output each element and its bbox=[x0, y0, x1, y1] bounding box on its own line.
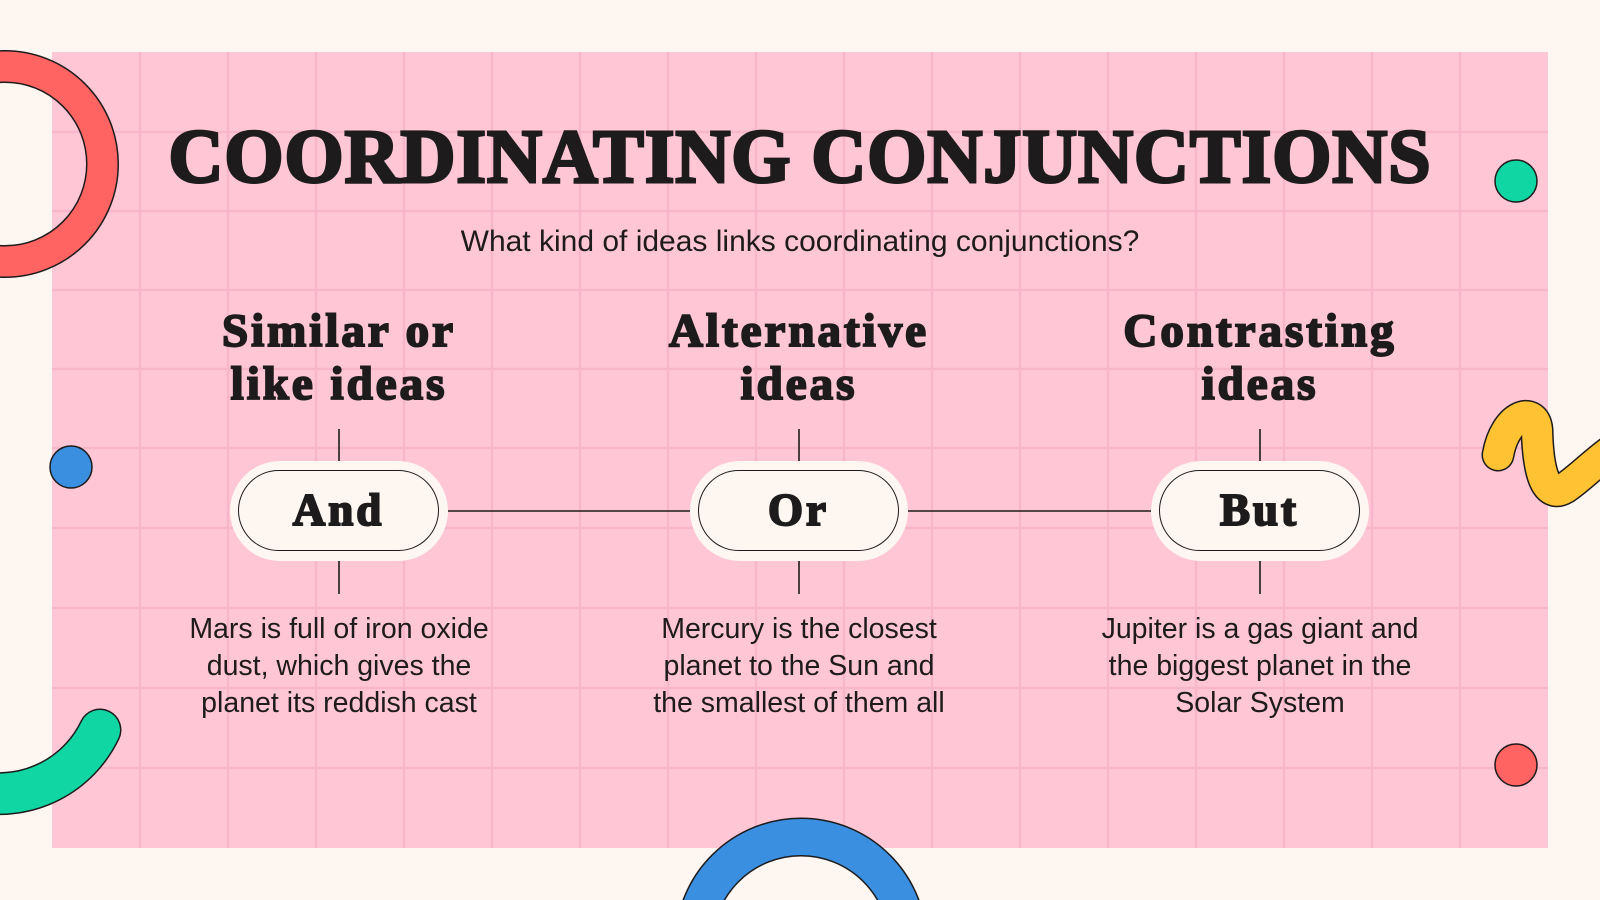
column: similar ideas bbox=[189, 305, 489, 719]
description: Jupiter: Solar System bbox=[1175, 687, 1345, 719]
description: Jupiter: Jupiter is a gas giant and bbox=[1102, 613, 1418, 645]
description: Jupiter bbox=[1102, 613, 1418, 719]
title: COORDINATING CONJUNCTIONS bbox=[169, 115, 1431, 199]
heading: contrasting bbox=[1123, 305, 1397, 410]
pill: And bbox=[230, 461, 448, 561]
heading: alternative bbox=[668, 305, 929, 410]
heading: similar: like ideas bbox=[231, 358, 447, 410]
subtitle: What kind of ideas links coordinating conjunctions? bbox=[461, 225, 1139, 258]
description: Mars: dust, which gives the bbox=[207, 650, 471, 682]
description: Mars: planet its reddish cast bbox=[201, 687, 477, 719]
heading: alternative: ideas bbox=[741, 358, 857, 410]
heading: similar bbox=[222, 305, 456, 410]
description: Mars bbox=[189, 613, 489, 719]
pill: Or bbox=[690, 461, 908, 561]
heading: contrasting: Contrasting bbox=[1123, 305, 1397, 357]
description: Mercury: Mercury is the closest bbox=[661, 613, 937, 645]
column: alternative ideas bbox=[653, 305, 945, 719]
pill: And: And bbox=[293, 485, 384, 535]
pill: But: But bbox=[1220, 485, 1299, 535]
column: contrasting ideas bbox=[1102, 305, 1418, 719]
pill: But bbox=[1151, 461, 1369, 561]
description: Mars: Mars is full of iron oxide bbox=[189, 613, 489, 645]
heading: similar: Similar or bbox=[222, 305, 456, 357]
heading: contrasting: ideas bbox=[1202, 358, 1318, 410]
description: Mercury bbox=[653, 613, 945, 719]
description: Jupiter: the biggest planet in the bbox=[1109, 650, 1411, 682]
description: Mercury: the smallest of them all bbox=[653, 687, 945, 719]
description: Mercury: planet to the Sun and bbox=[664, 650, 934, 682]
heading: alternative: Alternative bbox=[669, 305, 929, 357]
pill: Or: Or bbox=[768, 485, 829, 535]
